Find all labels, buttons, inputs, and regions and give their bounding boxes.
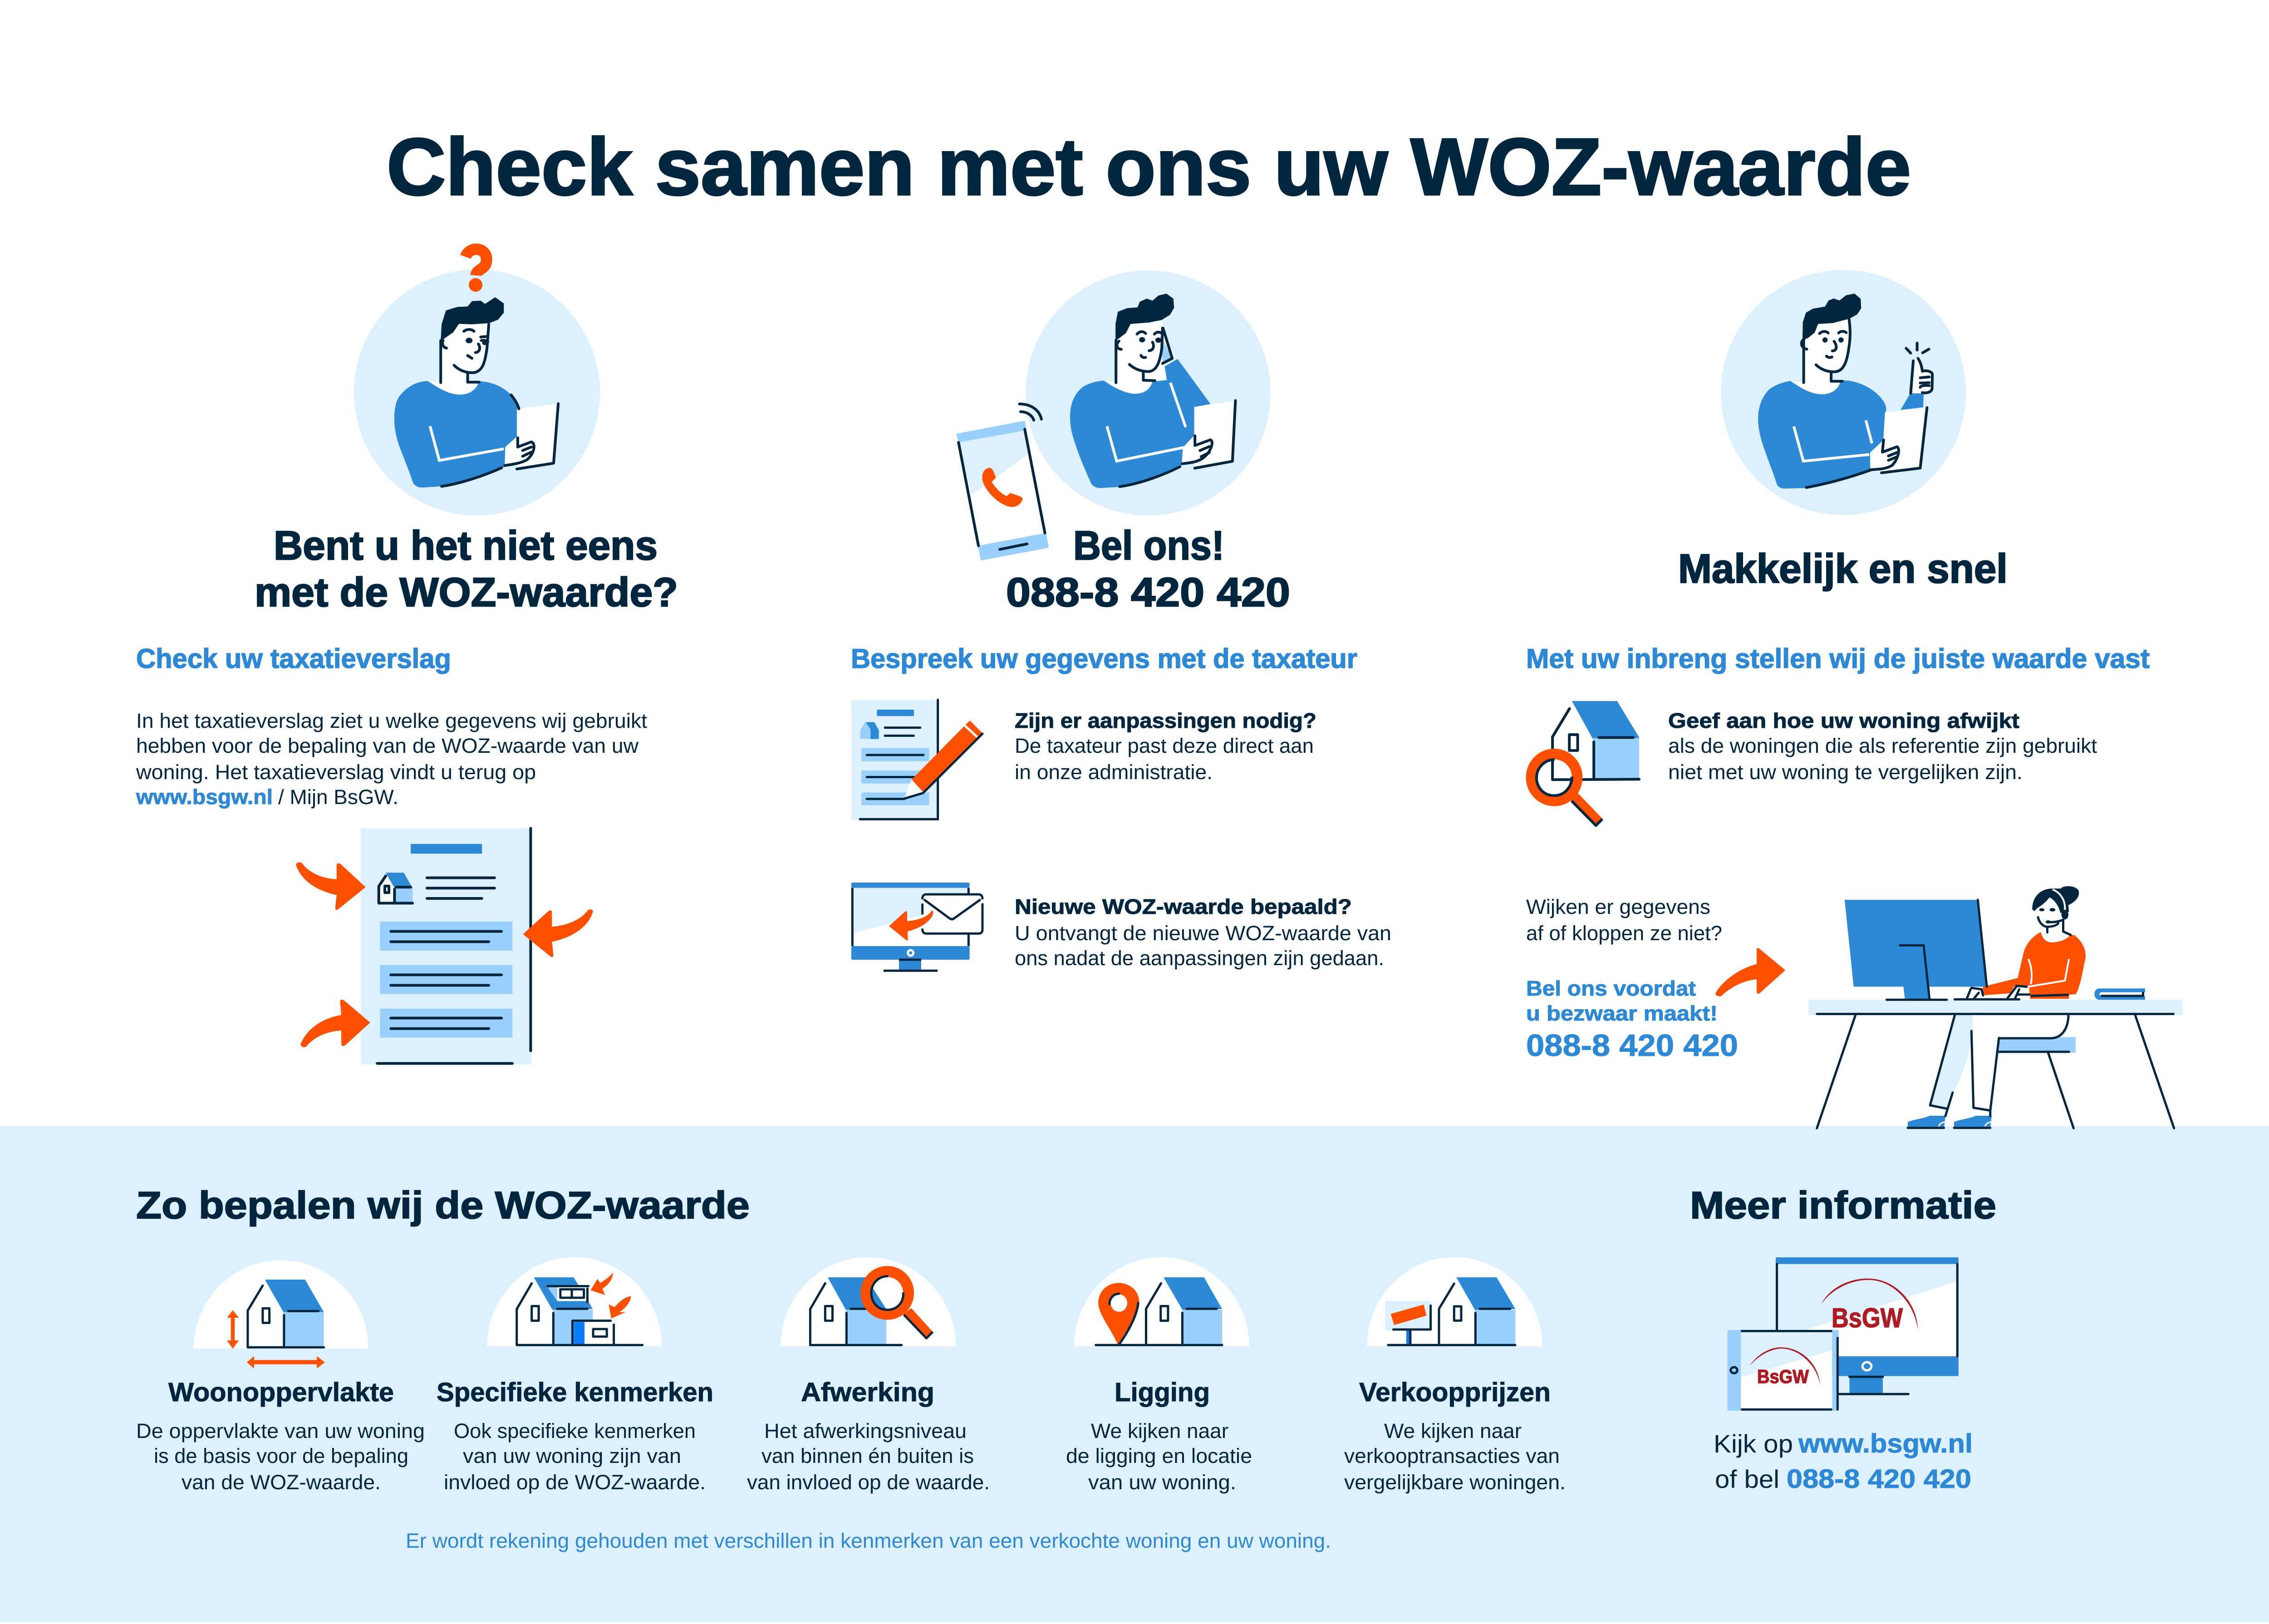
panel: meer informatie [1690,1184,1996,1494]
contact text: 088-8 420 420 [1787,1464,1971,1494]
description: van binnen én buiten is [761,1444,974,1467]
illustration: woman at desk with arrow [1715,886,2183,1128]
description: de ligging en locatie [1066,1444,1252,1467]
description [747,1419,990,1494]
icon: house with dormer and extension [487,1257,662,1346]
description: van uw woning zijn van [463,1444,681,1467]
panel: bel ons [851,270,1391,971]
illustration: monitor and tablet with BsGW logo: BsGW [1832,1303,1903,1333]
text block: nieuwe waarde [1015,895,1391,970]
icon: house with magnifier [1526,701,1639,825]
text block: wijken gegevens af: u bezwaar maakt! [1526,1001,1718,1025]
description: van uw woning. [1088,1471,1236,1494]
description: vergelijkbare woningen. [1344,1471,1566,1494]
text block: afwijking: niet met uw woning te vergelijken zijn. [1668,760,2023,784]
bottom band background [0,1126,2269,1622]
description [1066,1419,1252,1494]
text block: aanpassingen [1015,709,1316,784]
heading: met de WOZ-waarde? [255,570,678,615]
illustration: man with thumb raised [1721,270,1966,515]
subheading: Met uw inbreng stellen wij de juiste waarde vast [1526,643,2150,674]
heading [255,523,678,615]
description: We kijken naar [1091,1419,1228,1442]
title: Check samen met ons uw WOZ-waarde [387,122,1911,212]
contact text [1714,1429,1973,1494]
panel: makkelijk en snel [1526,270,2183,1128]
description: van invloed op de waarde. [747,1471,990,1494]
label: Specifieke kenmerken [437,1378,713,1407]
text block: nieuwe waarde: U ontvangt de nieuwe WOZ-waarde van [1015,922,1391,945]
label: Verkoopprijzen [1359,1378,1551,1407]
icon: house with magnifier [781,1257,956,1346]
heading: Bent u het niet eens [274,523,658,569]
footnote: Er wordt rekening gehouden met verschillen in kenmerken van een verkochte woning en uw woning. [406,1529,1331,1552]
contact text: www.bsgw.nl [1798,1429,1973,1458]
text block: wijken gegevens af: af of kloppen ze niet? [1526,922,1722,945]
text block: In het taxatieverslag ziet u welke gegevens wij gebruikt [136,709,648,732]
text block: afwijking [1668,709,2097,784]
icon: monitor with envelope [851,883,982,971]
text block: nieuwe waarde: Nieuwe WOZ-waarde bepaald? [1015,895,1352,918]
text block: wijken gegevens af: Bel ons voordat [1526,976,1696,1000]
contact text: of bel [1715,1465,1779,1493]
icon: document with pen [851,700,983,820]
text block: afwijking: als de woningen die als referentie zijn gebruikt [1668,734,2097,757]
icon: house with for-sale sign [1367,1257,1542,1346]
text block: afwijking: Geef aan hoe uw woning afwijkt [1668,709,2019,732]
text block: hebben voor de bepaling van de WOZ-waarde van uw [136,734,639,757]
description: verkooptransacties van [1344,1444,1560,1467]
contact text: Kijk op [1714,1429,1793,1458]
item: woonoppervlakte [136,1260,425,1494]
icon: house with location pin [1074,1257,1249,1346]
text block: aanpassingen: De taxateur past deze direct aan [1015,734,1314,757]
heading: Makkelijk en snel [1678,546,2008,592]
panel: zo bepalen wij de WOZ-waarde [136,1184,1566,1552]
description: van de WOZ-waarde. [182,1471,381,1494]
illustration: man with question mark [354,249,600,515]
description: is de basis voor de bepaling [154,1444,408,1467]
description: Het afwerkingsniveau [764,1419,967,1442]
description: Ook specifieke kenmerken [454,1419,696,1442]
icon: house with size arrows [194,1260,368,1369]
label: Woonoppervlakte [168,1378,394,1407]
label: Afwerking [801,1378,934,1407]
item: verkoopprijzen [1344,1257,1566,1494]
item: ligging [1066,1257,1252,1494]
illustration: monitor and tablet with BsGW logo: BsGW [1757,1366,1809,1387]
subheading: Check uw taxatieverslag [136,643,451,674]
item: afwerking [747,1257,990,1494]
text block [136,709,648,809]
heading: Bel ons! [1073,523,1224,569]
description [136,1419,425,1494]
text block: wijken gegevens af: Wijken er gegevens [1526,895,1710,918]
text block: / Mijn BsGW. [278,785,398,809]
heading: 088-8 420 420 [1006,570,1290,615]
text block: woning. Het taxatieverslag vindt u terug op [136,760,536,784]
panel: bent u het niet eens [136,249,678,1065]
heading: Zo bepalen wij de WOZ-waarde [136,1184,750,1227]
description: invloed op de WOZ-waarde. [444,1471,706,1494]
text block: aanpassingen: in onze administratie. [1015,760,1213,784]
heading: Meer informatie [1690,1184,1996,1227]
subheading: Bespreek uw gegevens met de taxateur [851,643,1357,674]
illustration: monitor and tablet with BsGW logo [1728,1257,1959,1411]
text block: wijken gegevens af: 088-8 420 420 [1526,1028,1738,1063]
description: De oppervlakte van uw woning [136,1419,425,1442]
heading [1006,523,1290,615]
label: Ligging [1115,1378,1210,1407]
description [444,1419,706,1494]
item: specifieke kenmerken [437,1257,713,1494]
text block: aanpassingen: Zijn er aanpassingen nodig? [1015,709,1316,732]
description [1344,1419,1566,1494]
text block: www.bsgw.nl [136,785,273,809]
description: We kijken naar [1384,1419,1522,1442]
text block: wijken gegevens af [1526,895,1738,1063]
illustration: tax report document with arrows [296,828,593,1065]
illustration: man on phone and smartphone [957,270,1271,560]
text block: nieuwe waarde: ons nadat de aanpassingen zijn gedaan. [1015,947,1384,970]
